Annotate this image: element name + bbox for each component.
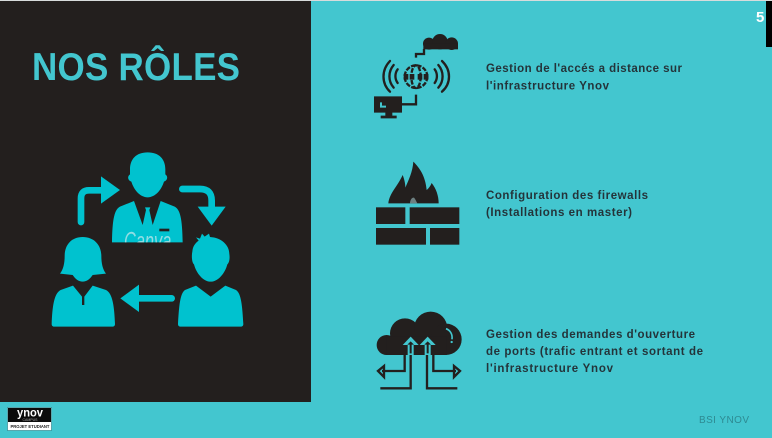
text: firewalls	[486, 190, 648, 219]
left person	[52, 237, 115, 327]
footer label: BSI YNOV	[699, 415, 749, 426]
icon: firewall	[376, 162, 459, 245]
text: port requests: l'infrastructure Ynov	[486, 363, 614, 375]
logo	[8, 406, 52, 430]
title: NOS RÔLES	[32, 44, 240, 88]
logo: PROJET ETUDIANT	[10, 424, 50, 429]
text: remote access	[486, 63, 683, 92]
top person with suit	[112, 152, 183, 242]
logo: CAMPUS	[23, 418, 38, 422]
page number: 5	[756, 9, 764, 26]
logo: ynov	[17, 406, 43, 420]
page marker bar	[766, 1, 772, 47]
text: firewalls: Configuration des firewalls	[486, 190, 648, 202]
arrow: up and right	[81, 176, 120, 222]
text: port requests	[486, 329, 703, 375]
right person	[178, 234, 243, 327]
icon: cloud ports	[377, 312, 462, 388]
icon: remote access	[374, 34, 458, 118]
text: port requests: de ports (trafic entrant et sortant de	[486, 346, 703, 358]
left dark panel	[0, 1, 311, 402]
arrow: right and down	[182, 189, 226, 226]
arrow: left	[120, 285, 172, 312]
text: firewalls: (Installations en master)	[486, 207, 632, 219]
icon: team role cycle	[52, 152, 243, 327]
top person with suit: Canva	[124, 227, 171, 255]
text: remote access: l'infrastructure Ynov	[486, 80, 610, 92]
text: remote access: Gestion de l'accés a distance sur	[486, 63, 683, 75]
text: port requests: Gestion des demandes d'ouverture	[486, 329, 695, 341]
